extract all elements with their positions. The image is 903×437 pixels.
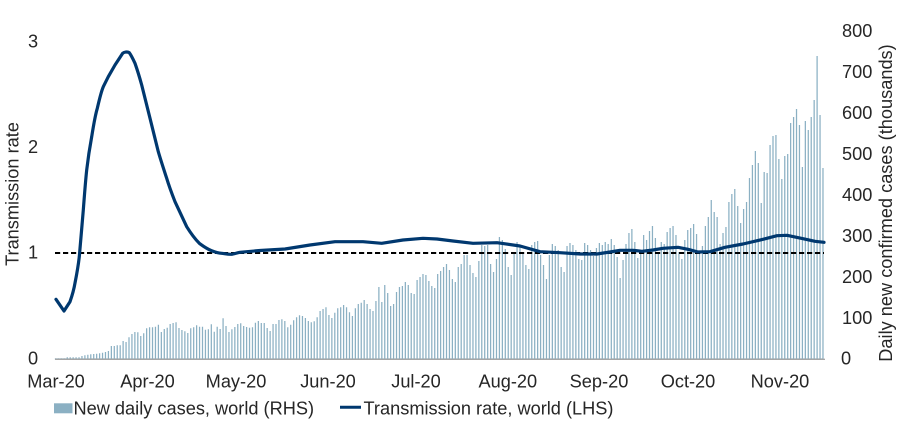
right axis tick labels: 800 [842, 21, 872, 41]
left axis tick labels: 2 [28, 137, 38, 157]
x axis labels: Mar-20 [27, 372, 85, 392]
left axis tick labels: 3 [28, 32, 38, 52]
legend label: new daily cases: New daily cases, world (RHS) [74, 398, 314, 418]
x axis labels: Aug-20 [478, 372, 537, 392]
right axis tick labels: 0 [841, 348, 851, 368]
x axis labels: Sep-20 [570, 372, 628, 392]
right axis tick labels: 200 [842, 267, 872, 287]
x axis labels: Oct-20 [661, 372, 715, 392]
x axis labels: Jun-20 [300, 372, 356, 392]
x axis labels: Nov-20 [751, 372, 809, 392]
bars: new daily cases, world [56, 56, 823, 359]
legend label: transmission rate: Transmission rate, world (LHS) [364, 398, 613, 418]
x axis labels [27, 372, 809, 392]
left axis tick labels: 1 [28, 242, 38, 262]
x axis labels: Apr-20 [120, 372, 175, 392]
line: transmission rate, world [56, 52, 824, 311]
left axis tick labels [28, 32, 38, 368]
x axis labels: Jul-20 [391, 372, 441, 392]
x axis labels: May-20 [206, 372, 266, 392]
reference line at transmission rate 1 [55, 252, 824, 254]
right axis tick labels: 500 [842, 144, 872, 164]
right axis title: Daily new confirmed cases (thousands) [876, 44, 896, 362]
left axis title: Transmission rate [2, 122, 22, 266]
right axis tick labels: 600 [842, 103, 872, 123]
legend swatch: new daily cases [54, 403, 72, 413]
right axis tick labels [841, 21, 872, 368]
left axis tick labels: 0 [28, 348, 38, 368]
right axis tick labels: 700 [842, 62, 872, 82]
legend [54, 398, 613, 418]
legend swatch: transmission rate [340, 406, 361, 409]
right axis tick labels: 300 [842, 226, 872, 246]
x axis line [55, 358, 825, 360]
right axis tick labels: 100 [842, 308, 872, 328]
right axis tick labels: 400 [842, 185, 872, 205]
